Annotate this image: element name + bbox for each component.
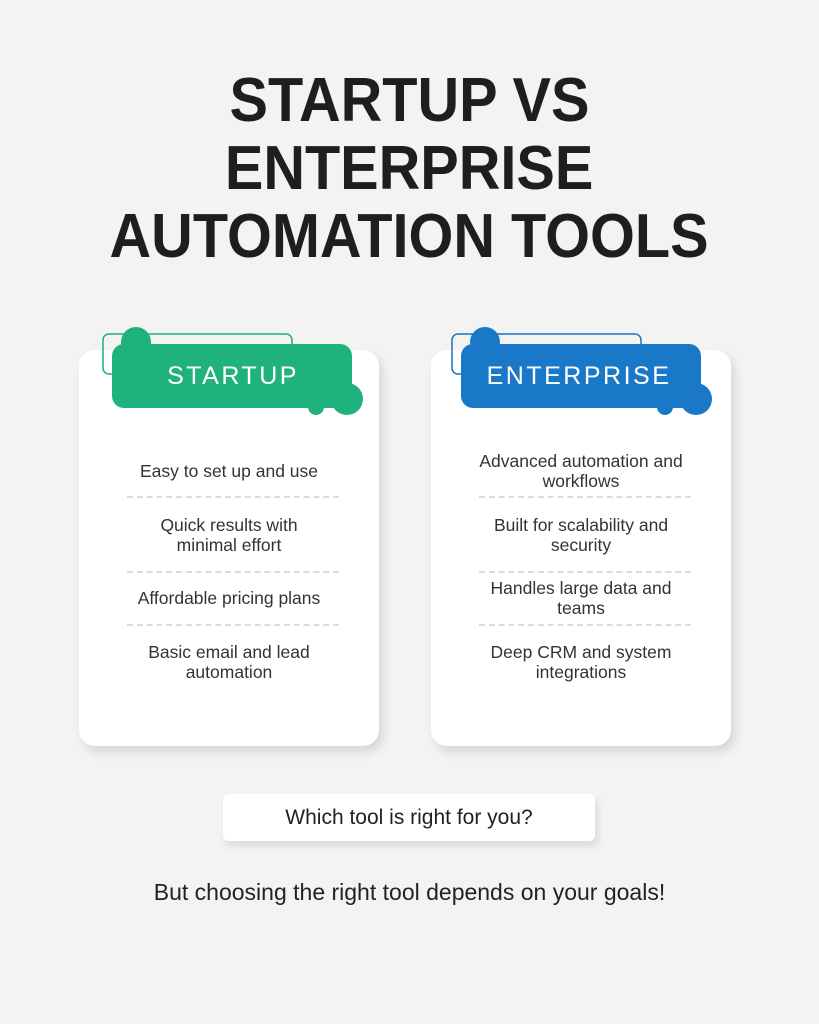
badge: startup	[102, 327, 363, 415]
text: enterprise item 4: integrations	[536, 662, 626, 682]
title: STARTUP VS	[230, 66, 589, 135]
badge: enterprise	[451, 327, 712, 415]
title	[110, 66, 709, 271]
text: enterprise item 2: security	[551, 535, 611, 555]
badge: startup: STARTUP	[167, 362, 299, 390]
text: enterprise item 1: Advanced automation and	[479, 451, 683, 471]
text: enterprise item 2	[494, 515, 668, 555]
text: startup item 4: Basic email and lead	[148, 642, 310, 662]
text: startup item 4: automation	[186, 662, 272, 682]
text: startup item 2: Quick results with	[160, 515, 298, 535]
text: startup item 1: Easy to set up and use	[140, 461, 318, 481]
panel: enterprise	[431, 350, 731, 746]
title: ENTERPRISE	[225, 134, 594, 203]
text: startup item 4	[148, 642, 310, 682]
text: enterprise item 2: Built for scalability and	[494, 515, 668, 535]
text: startup item 2: minimal effort	[177, 535, 281, 555]
text: startup item 2	[160, 515, 298, 555]
badge: enterprise: ENTERPRISE	[487, 362, 671, 390]
text: enterprise item 3: Handles large data and	[491, 578, 671, 598]
callout: question: Which tool is right for you?	[285, 806, 533, 829]
text: startup item 3: Affordable pricing plans	[138, 588, 320, 608]
panel: startup	[79, 350, 379, 746]
text: enterprise item 4	[491, 642, 671, 682]
callout: question	[223, 794, 595, 841]
text: enterprise item 1	[479, 451, 683, 491]
text: enterprise item 4: Deep CRM and system	[491, 642, 671, 662]
text: footer: But choosing the right tool depends on your goals!	[154, 879, 665, 905]
text: enterprise item 1: workflows	[543, 471, 619, 491]
text: enterprise item 3	[491, 578, 671, 618]
text: enterprise item 3: teams	[557, 598, 605, 618]
title: AUTOMATION TOOLS	[110, 202, 709, 271]
